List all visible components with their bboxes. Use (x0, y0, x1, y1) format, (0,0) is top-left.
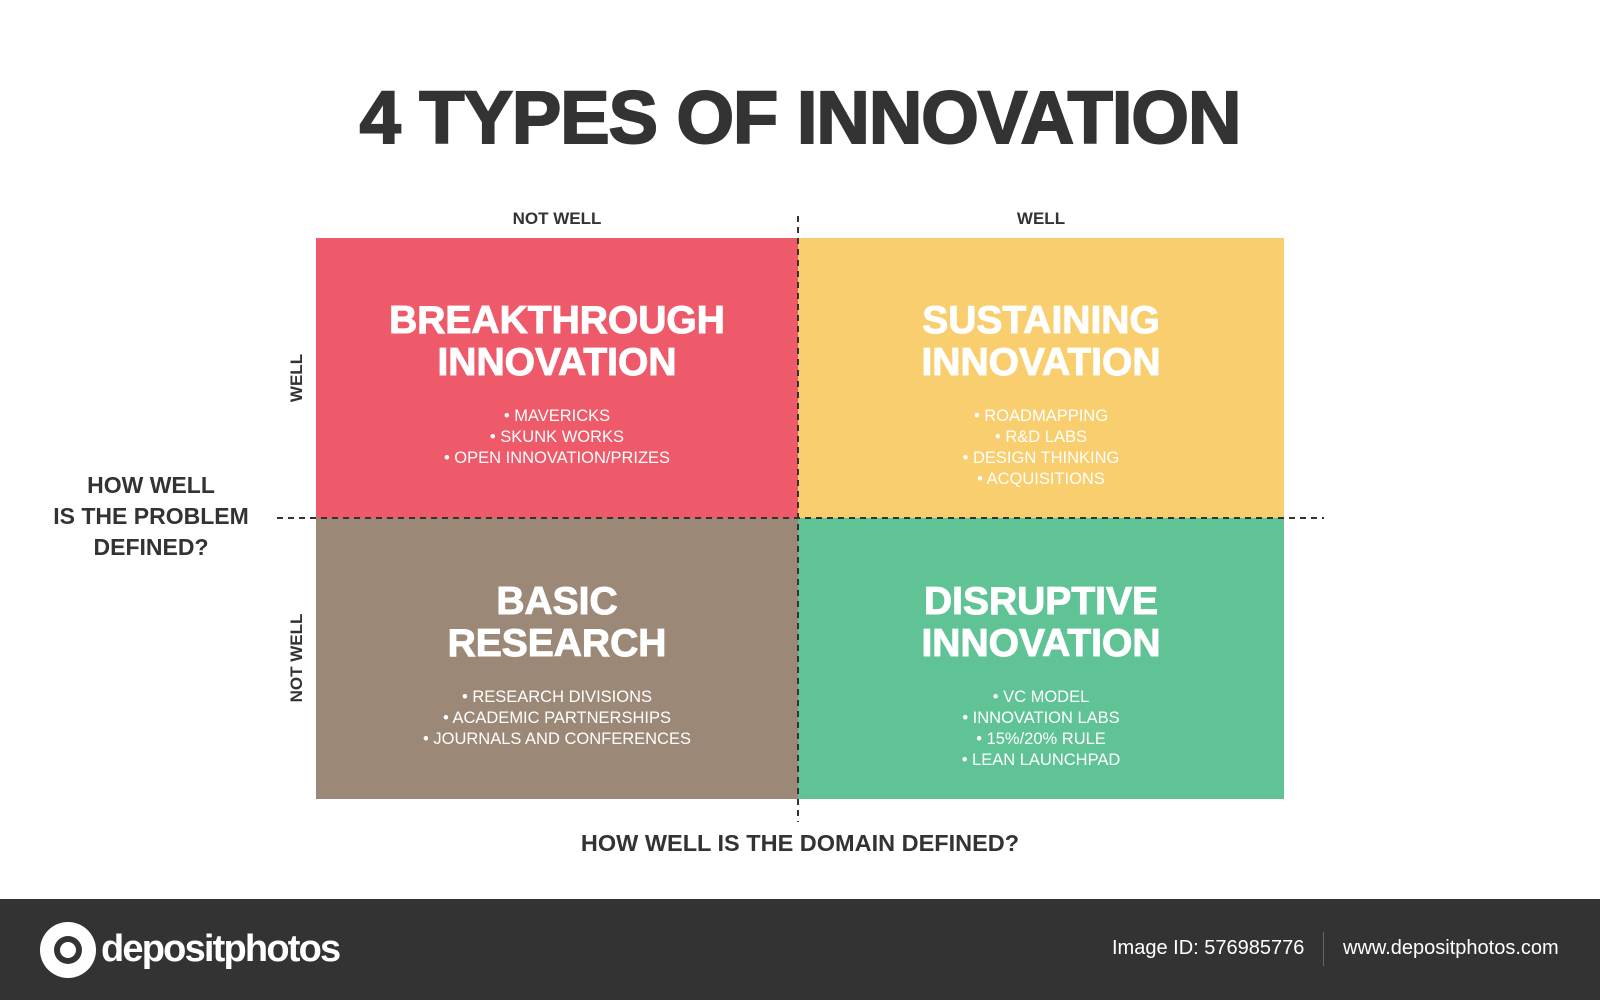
quadrant: sustaining: • ACQUISITIONS (977, 470, 1105, 488)
axis label: well top: WELL (1017, 209, 1065, 228)
quadrant: breakthrough (316, 238, 798, 518)
title: 4 TYPES OF INNOVATION (360, 76, 1240, 159)
quadrant: disruptive: • 15%/20% RULE (976, 730, 1106, 748)
logo text: depositphotos (101, 928, 339, 970)
quadrant: disruptive: • LEAN LAUNCHPAD (962, 751, 1120, 769)
quadrant: disruptive: INNOVATION (921, 622, 1161, 665)
axis label: not well left: NOT WELL (287, 614, 306, 702)
quadrant: sustaining: • DESIGN THINKING (963, 449, 1119, 467)
quadrant: sustaining: • R&D LABS (995, 428, 1087, 446)
image id: Image ID: 576985776 (1112, 937, 1304, 959)
website: www.depositphotos.com (1343, 937, 1559, 959)
quadrant: breakthrough: • OPEN INNOVATION/PRIZES (444, 449, 670, 467)
quadrant: breakthrough: INNOVATION (437, 341, 677, 384)
x axis title: HOW WELL IS THE DOMAIN DEFINED? (581, 830, 1019, 856)
quadrant: sustaining: • ROADMAPPING (974, 407, 1108, 425)
y axis title: IS THE PROBLEM (53, 503, 249, 529)
quadrant: disruptive: • INNOVATION LABS (962, 709, 1120, 727)
quadrant: breakthrough: BREAKTHROUGH (389, 299, 725, 342)
y axis title: DEFINED? (94, 534, 208, 560)
quadrant: sustaining: SUSTAINING (922, 299, 1160, 342)
y axis title: HOW WELL (87, 472, 215, 498)
quadrant: breakthrough: • SKUNK WORKS (490, 428, 624, 446)
quadrant: basic research: • JOURNALS AND CONFERENCES (423, 730, 691, 748)
quadrant: disruptive: DISRUPTIVE (924, 580, 1158, 623)
quadrant: breakthrough: • MAVERICKS (504, 407, 610, 425)
quadrant: basic research: • ACADEMIC PARTNERSHIPS (443, 709, 671, 727)
y axis title (53, 472, 249, 560)
quadrant: disruptive (798, 518, 1284, 799)
quadrant: basic research (316, 518, 798, 799)
quadrant: basic research: RESEARCH (448, 622, 666, 665)
quadrant: disruptive: • VC MODEL (993, 688, 1089, 706)
logo icon (40, 922, 96, 978)
axis label: not well top: NOT WELL (513, 209, 601, 228)
quadrant: basic research: BASIC (496, 580, 618, 623)
quadrant: basic research: • RESEARCH DIVISIONS (462, 688, 652, 706)
quadrant: sustaining: INNOVATION (921, 341, 1161, 384)
footer bar (0, 899, 1600, 1000)
axis label: well left: WELL (287, 354, 306, 402)
quadrant: sustaining (798, 238, 1284, 518)
